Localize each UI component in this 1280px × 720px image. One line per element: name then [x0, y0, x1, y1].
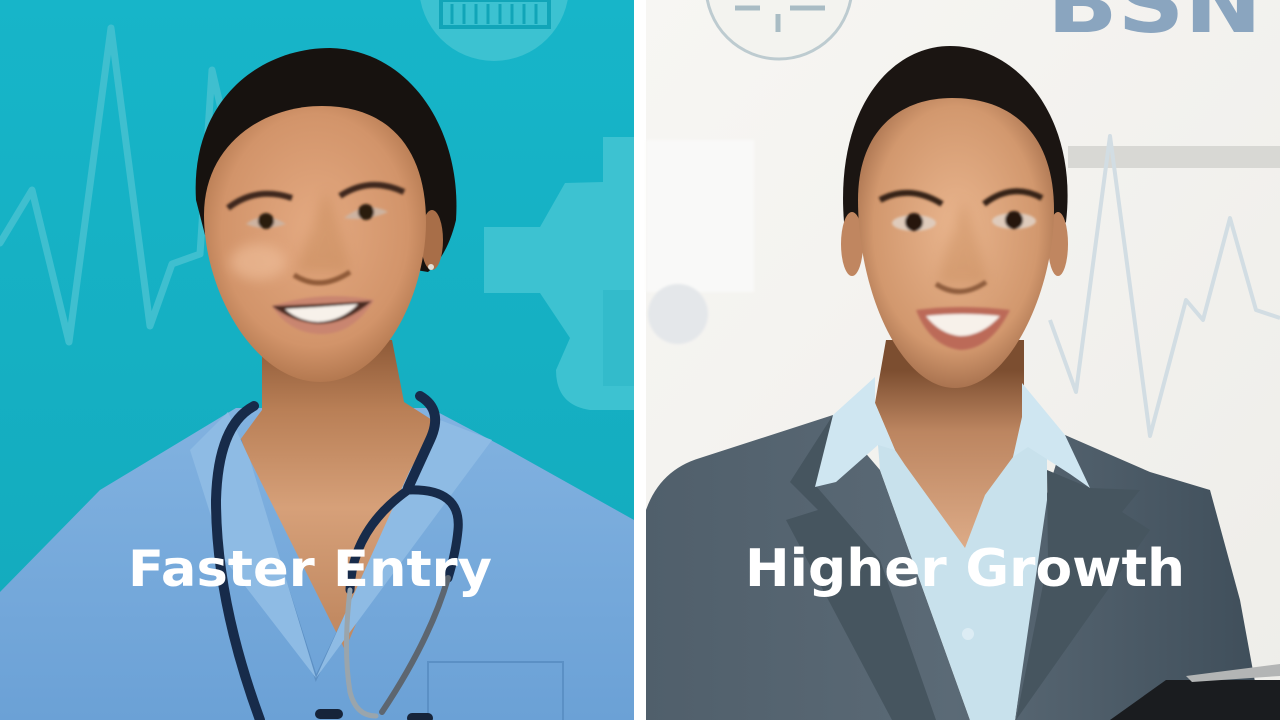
professional portrait — [646, 46, 1280, 720]
shirt collar — [815, 377, 1090, 488]
cheek highlight — [230, 244, 286, 280]
left brow — [880, 193, 942, 204]
shirt button — [962, 628, 974, 640]
right brow — [984, 191, 1042, 204]
nose shadow — [296, 190, 350, 272]
ears — [841, 212, 1068, 276]
pocket — [428, 662, 563, 720]
hair back — [196, 48, 456, 272]
nose — [936, 282, 986, 292]
left brow — [228, 194, 292, 208]
background shapes — [646, 140, 754, 292]
mouth — [916, 307, 1010, 350]
right eye — [992, 211, 1036, 229]
left eye — [892, 213, 936, 231]
nurse portrait — [0, 48, 634, 720]
earring — [428, 264, 434, 270]
neck — [875, 340, 1024, 548]
scrub collars — [190, 412, 492, 678]
stethoscope — [216, 396, 458, 720]
right lapel — [1016, 470, 1150, 720]
shirt — [878, 445, 1047, 720]
face — [858, 98, 1054, 388]
face — [204, 106, 426, 382]
suit jacket — [646, 415, 1262, 720]
icon: meeting badge — [706, 0, 852, 59]
facial features — [880, 191, 1042, 350]
clipboard — [1110, 664, 1280, 720]
nose — [294, 272, 350, 283]
left lapel — [786, 415, 936, 720]
right brow — [340, 185, 404, 196]
neck and chest — [240, 340, 440, 650]
scrubs — [0, 408, 634, 720]
hair — [843, 46, 1068, 240]
left eye — [246, 213, 286, 229]
nose shadow — [938, 200, 988, 284]
panel: faster entry nurse — [0, 0, 634, 720]
heading: faster entry: Faster Entry — [128, 540, 492, 598]
right eye — [344, 204, 388, 220]
panel: higher growth professional — [646, 0, 1280, 720]
ear — [421, 210, 443, 270]
heading: higher growth: Higher Growth — [745, 539, 1185, 599]
v neck shading — [240, 420, 440, 678]
background bar — [1068, 146, 1280, 168]
icon: medical cross — [484, 137, 634, 410]
icon: heartbeat line — [0, 28, 226, 342]
icon: hospital badge — [419, 0, 569, 61]
facial features — [228, 185, 404, 334]
icon: heartbeat line — [1050, 136, 1280, 436]
mouth — [272, 296, 374, 334]
